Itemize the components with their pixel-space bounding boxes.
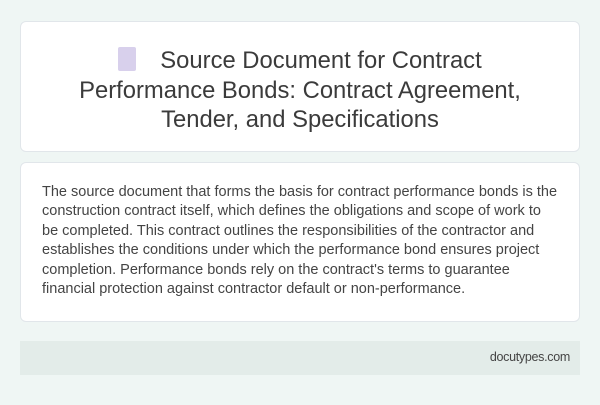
text block: description: be completed. This contract outlines the responsibilities of the contractor and [42,223,534,239]
footer bar [20,341,580,375]
title: Tender, and Specifications [161,106,439,133]
title [79,47,521,133]
footer text: docutypes.com [490,350,570,364]
text block: description: establishes the conditions under which the performance bond ensures project [42,242,539,258]
text block: description: completion. Performance bonds rely on the contract's terms to guarantee [42,262,510,278]
panel: title card [20,21,580,152]
panel: description card [20,162,580,322]
text block: description [42,184,557,297]
icon: document [118,47,136,71]
text block: description: construction contract itself, which defines the obligations and scope of work to [42,203,541,219]
text block: description: financial protection against contractor default or non-performance. [42,281,465,297]
text block: description: The source document that forms the basis for contract performance bonds is the [42,184,557,200]
title: Source Document for Contract [160,47,482,74]
title: Performance Bonds: Contract Agreement, [79,76,521,104]
